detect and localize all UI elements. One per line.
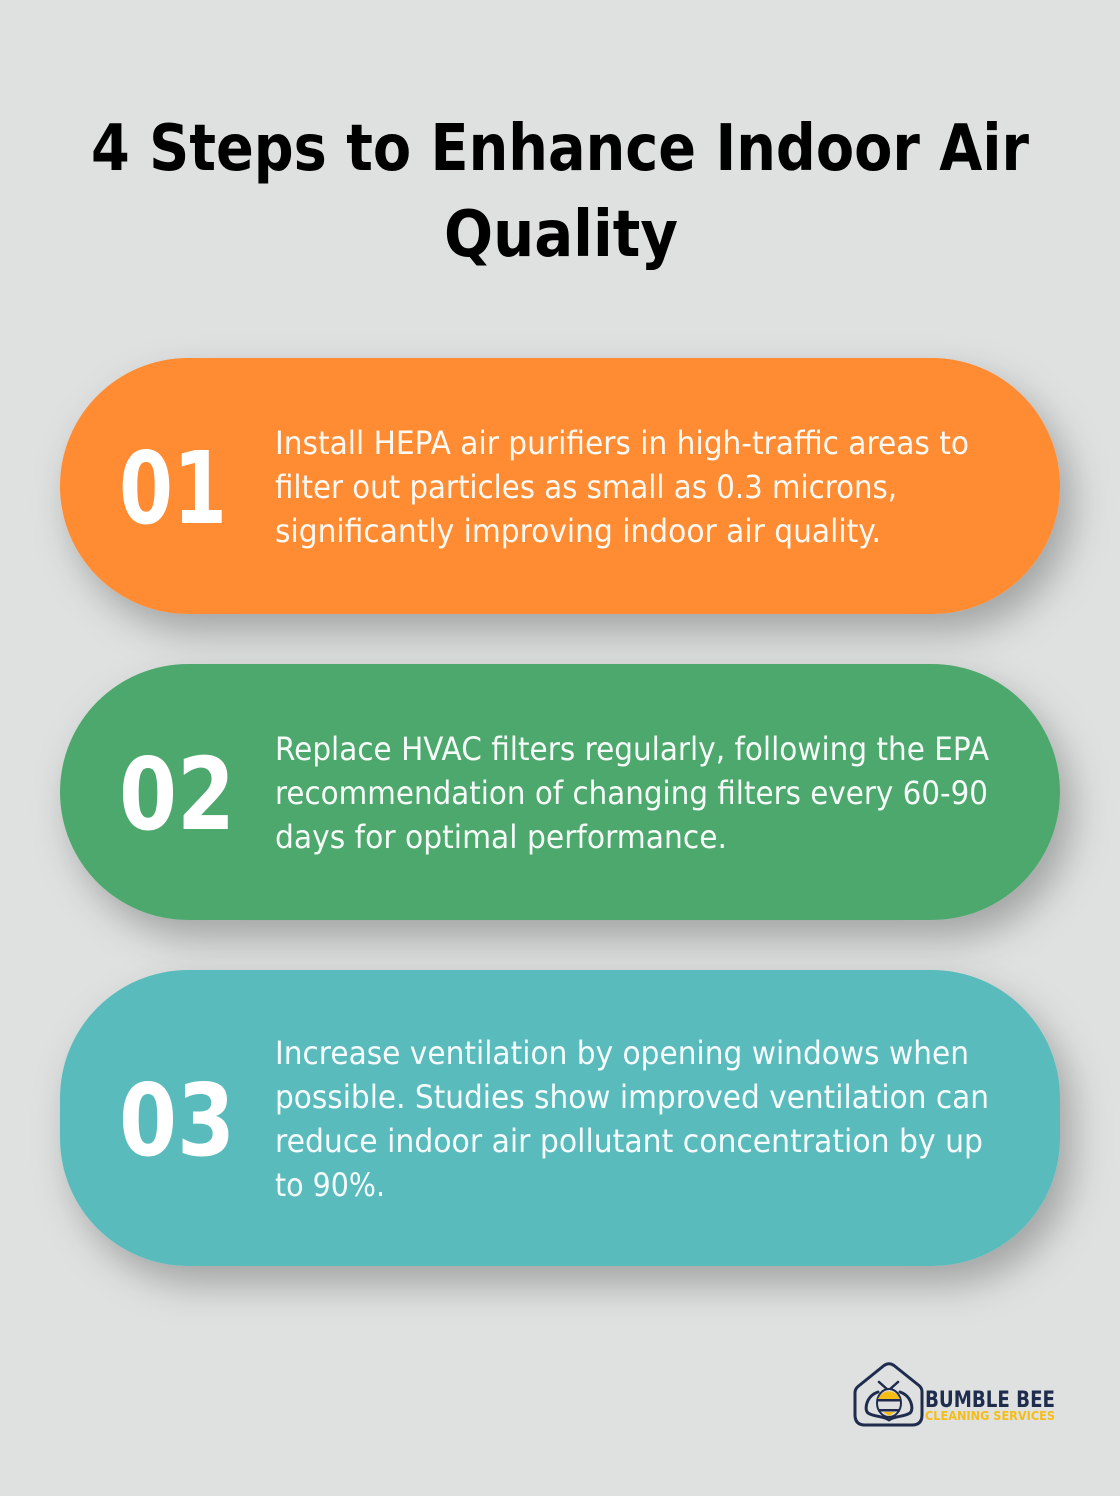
panel: step 03: [60, 970, 1060, 1266]
step 02 description: days for optimal performance.: [275, 818, 727, 856]
icon: house with bee: [855, 1364, 922, 1425]
step number 01: 01: [119, 430, 227, 547]
step 03 description: Increase ventilation by opening windows when: [275, 1034, 969, 1072]
brand name: BUMBLE BEE: [925, 1388, 1055, 1413]
logo: Bumble Bee Cleaning Services: [855, 1364, 1055, 1425]
step number 03: 03: [119, 1062, 235, 1179]
title: [91, 112, 1029, 272]
step 03 description: reduce indoor air pollutant concentration by up: [275, 1122, 983, 1160]
title: Quality: [444, 198, 678, 272]
step 01 description: Install HEPA air purifiers in high-traffic areas to: [275, 424, 969, 462]
step number 02: 02: [119, 736, 235, 853]
panel: step 01: [60, 358, 1060, 614]
panel: step 02: [60, 664, 1060, 920]
step 02 description: [275, 730, 989, 856]
step 02 description: recommendation of changing filters every 60-90: [275, 774, 988, 812]
step 03 description: possible. Studies show improved ventilation can: [275, 1078, 989, 1116]
step 02 description: Replace HVAC filters regularly, following the EPA: [275, 730, 989, 768]
step 01 description: [275, 424, 969, 550]
step 03 description: to 90%.: [275, 1166, 385, 1204]
step 01 description: significantly improving indoor air quality.: [275, 512, 881, 550]
step 01 description: filter out particles as small as 0.3 microns,: [275, 468, 897, 506]
step 03 description: [275, 1034, 989, 1204]
brand tagline: CLEANING SERVICES: [925, 1408, 1055, 1423]
